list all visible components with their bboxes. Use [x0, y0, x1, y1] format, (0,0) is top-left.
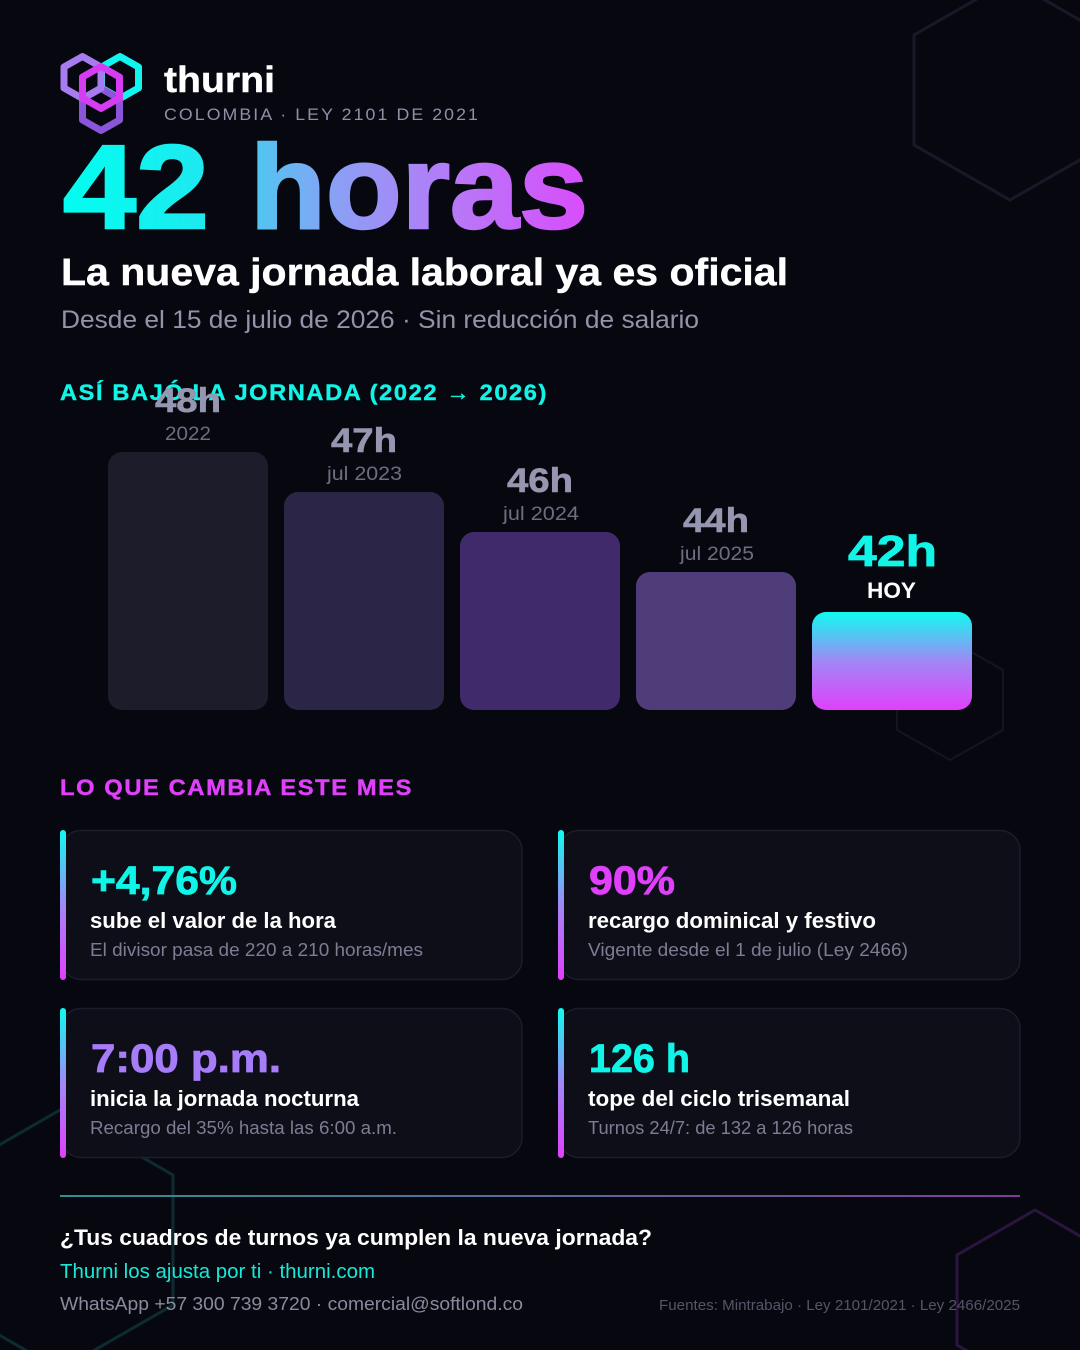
card: ciclo trisemanal — [558, 1008, 1020, 1158]
bar: hoy: HOY — [867, 578, 916, 603]
bar: jul 2024: 46h — [507, 462, 573, 500]
headline: 42 horas — [63, 121, 588, 254]
bar: jul 2025: jul 2025 — [679, 544, 754, 565]
bar: 2022 — [108, 382, 268, 710]
footer question: ¿Tus cuadros de turnos ya cumplen la nueva jornada? — [60, 1225, 652, 1250]
card: jornada nocturna: Recargo del 35% hasta las 6:00 a.m. — [90, 1118, 397, 1138]
card: recargo dominical: 90% — [589, 859, 675, 903]
header: logo and brand — [64, 56, 480, 130]
bar: hoy — [812, 527, 972, 710]
bar: jul 2024 — [460, 462, 620, 710]
card: ciclo trisemanal: Turnos 24/7: de 132 a 126 horas — [588, 1118, 853, 1138]
footer contact: WhatsApp +57 300 739 3720 · comercial@softlond.co — [60, 1294, 523, 1314]
card: recargo dominical: Vigente desde el 1 de julio (Ley 2466) — [588, 940, 908, 960]
section heading: cambios: LO QUE CAMBIA ESTE MES — [60, 775, 413, 800]
footer — [60, 1225, 1020, 1314]
hexagon: bottom right — [957, 1210, 1080, 1350]
bar: jul 2024: jul 2024 — [502, 504, 579, 525]
headline: 42 horas: horas — [250, 121, 588, 254]
card: jornada nocturna: 7:00 p.m. — [91, 1037, 281, 1081]
card: valor de la hora: +4,76% — [91, 859, 237, 903]
card: jornada nocturna: inicia la jornada nocturna — [90, 1086, 360, 1111]
brand tagline: COLOMBIA · LEY 2101 DE 2021 — [164, 105, 480, 124]
hexagon: bottom left — [0, 1110, 173, 1350]
icon: thurni logo — [64, 56, 138, 130]
headline: 42 horas: 42 — [63, 121, 209, 254]
section heading: jornada: ASÍ BAJÓ LA JORNADA (2022 → 2026) — [60, 380, 548, 405]
bar: jul 2023: jul 2023 — [326, 464, 402, 485]
card: valor de la hora — [60, 830, 522, 980]
card: valor de la hora: sube el valor de la hora — [90, 908, 337, 933]
bar: 2022: 48h — [155, 382, 221, 420]
bar: hoy: 42h — [848, 527, 937, 576]
date line: Desde el 15 de julio de 2026 · Sin reducción de salario — [61, 306, 699, 334]
card: valor de la hora: El divisor pasa de 220 a 210 horas/mes — [90, 940, 423, 960]
footer call to action: Thurni los ajusta por ti · thurni.com — [60, 1261, 375, 1283]
card: recargo dominical — [558, 830, 1020, 980]
footer sources: Fuentes: Mintrabajo · Ley 2101/2021 · Ley 2466/2025 — [659, 1297, 1020, 1314]
hexagon: behind last bar — [897, 640, 1003, 760]
bar: jul 2023: 47h — [331, 422, 397, 460]
bar: jul 2025 — [636, 502, 796, 710]
card: ciclo trisemanal: tope del ciclo trisemanal — [588, 1086, 850, 1111]
bar: jul 2025: 44h — [683, 502, 749, 540]
bar: jul 2023 — [284, 422, 444, 710]
bar: 2022: 2022 — [165, 424, 211, 445]
card: ciclo trisemanal: 126 h — [589, 1037, 690, 1081]
subtitle: La nueva jornada laboral ya es oficial — [61, 252, 788, 294]
card: recargo dominical: recargo dominical y festivo — [588, 908, 876, 933]
bar chart: jornada reduction — [108, 382, 972, 710]
hexagon: top right — [914, 0, 1080, 200]
card: jornada nocturna — [60, 1008, 522, 1158]
brand name: thurni — [164, 59, 275, 100]
